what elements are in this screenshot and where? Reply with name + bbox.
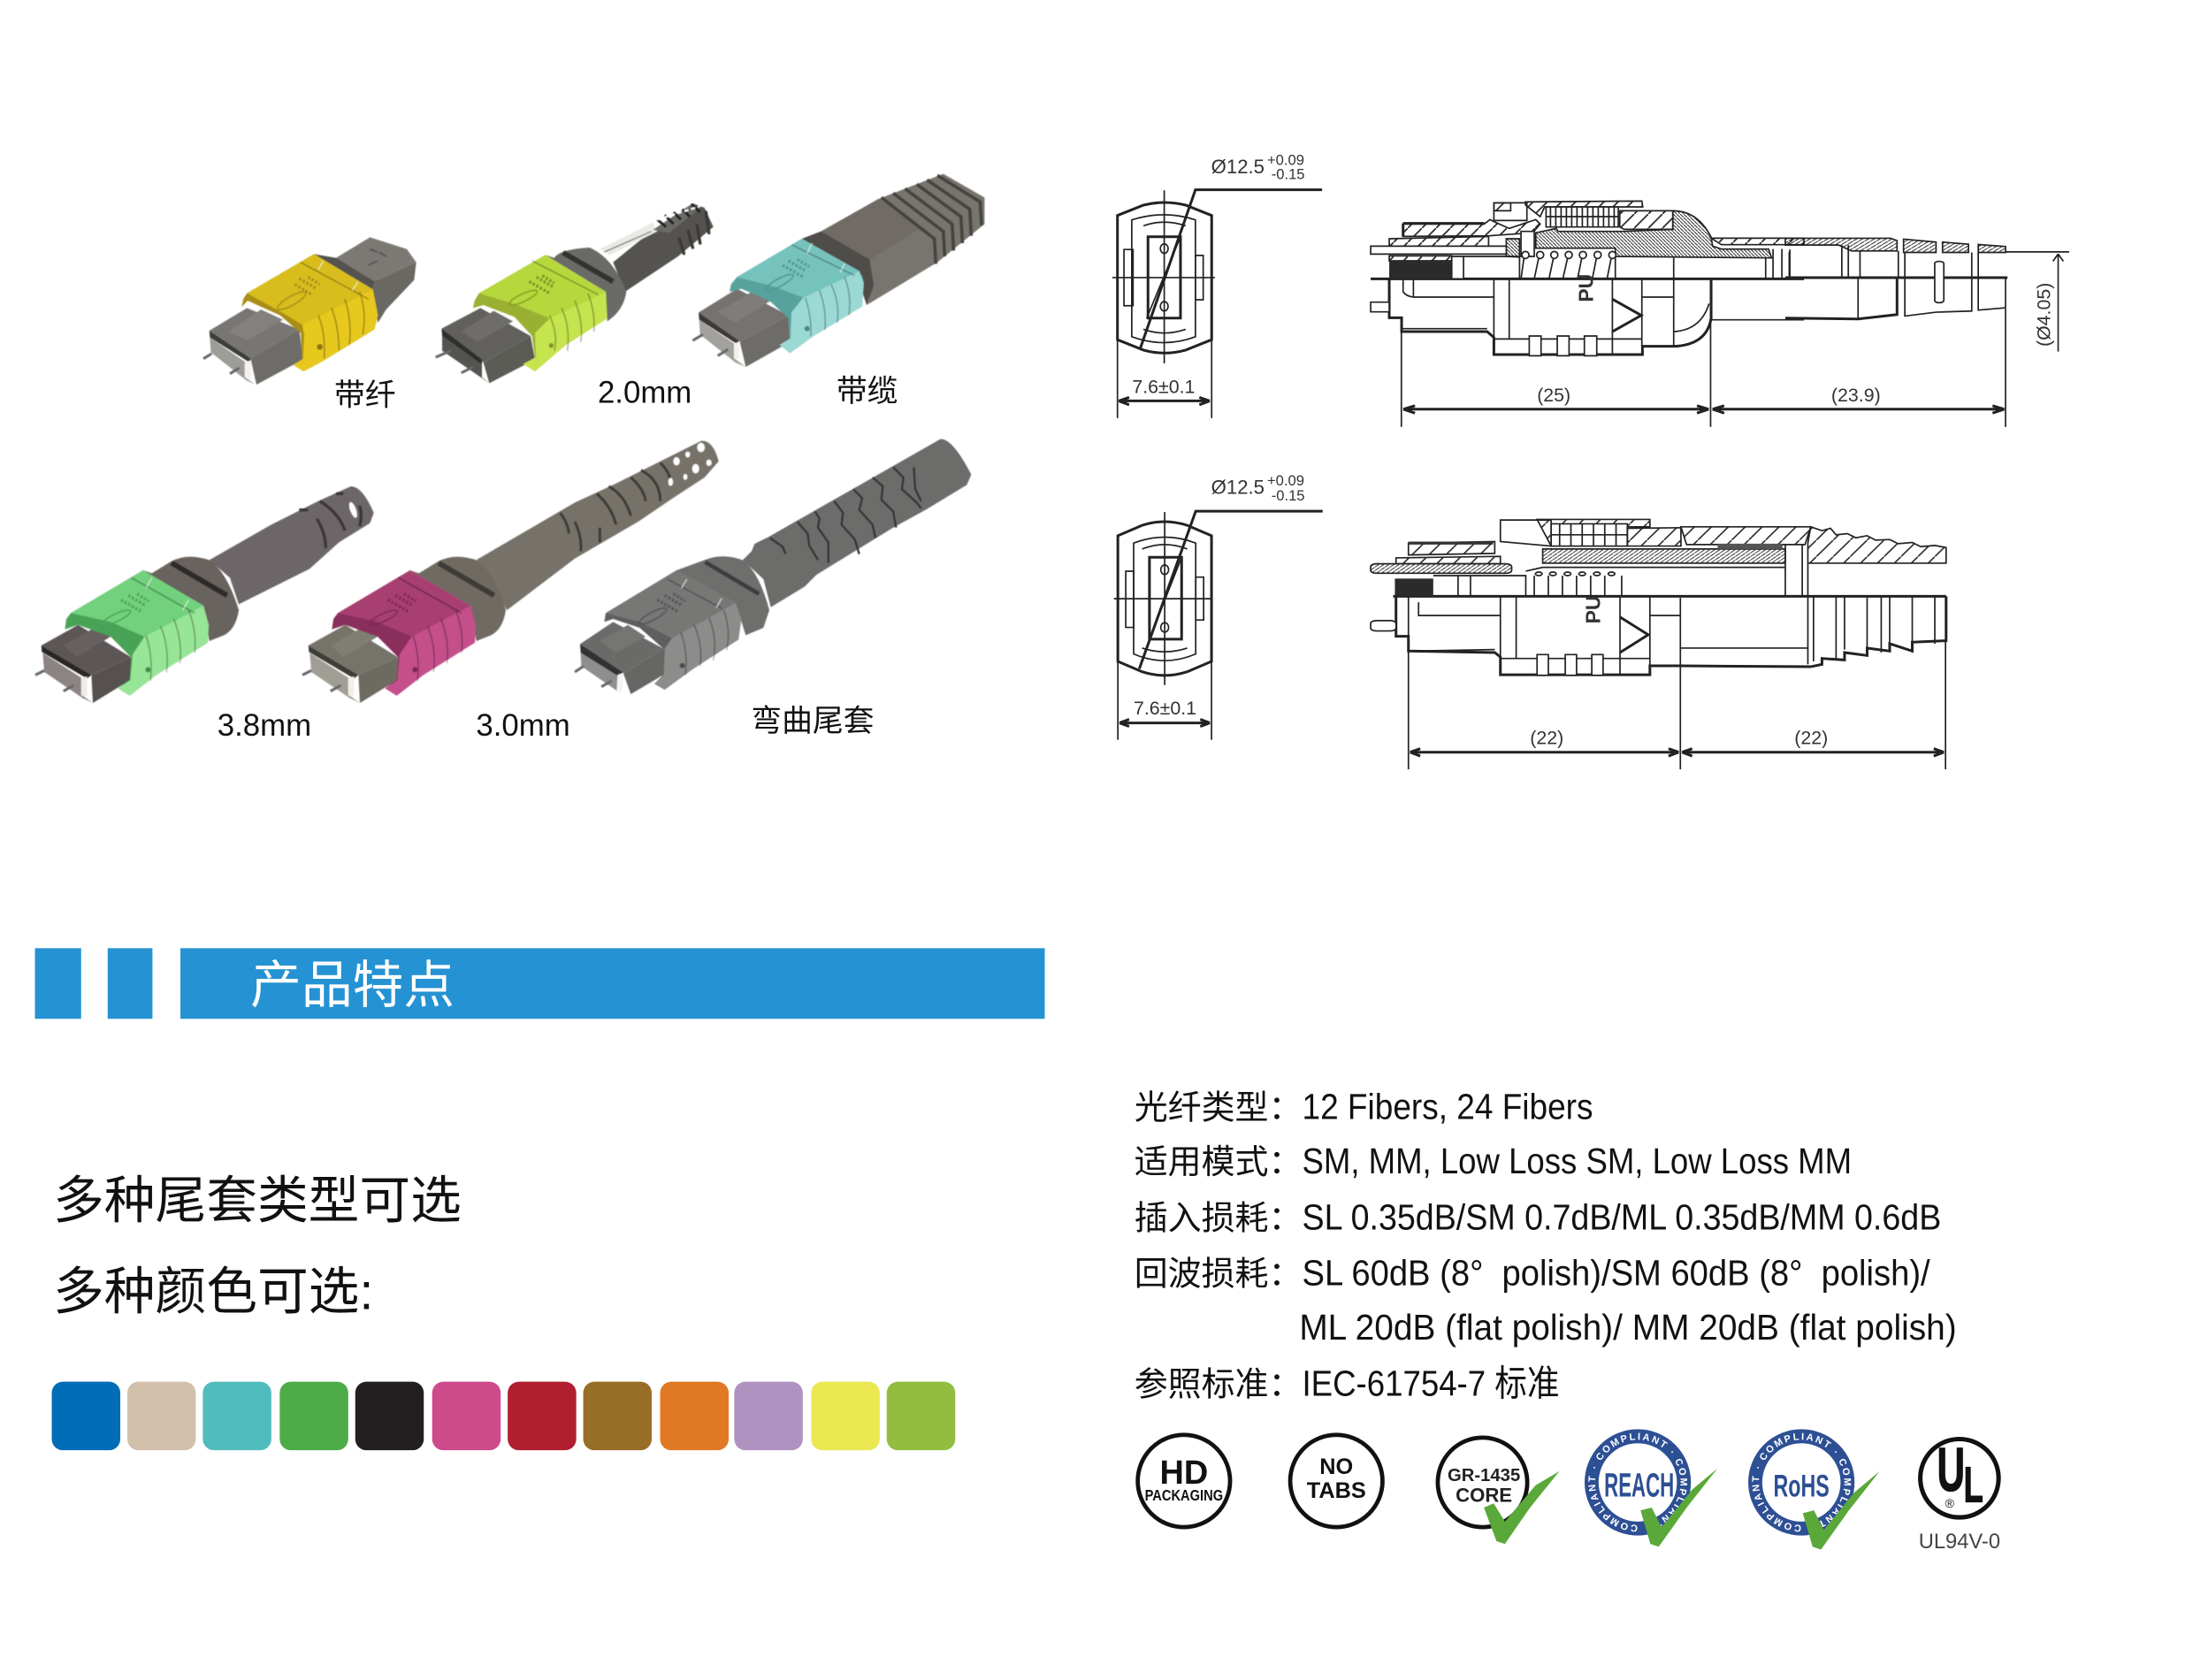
spec: fiber type: 12 Fibers, 24 Fibers xyxy=(1302,1086,1593,1126)
dimension: diameter: +0.09 xyxy=(1267,152,1304,169)
label: ribbon cable: 带缆 xyxy=(837,374,898,409)
dimension: diameter: -0.15 xyxy=(1272,165,1305,182)
badge: GR-1435 core: GR-1435 xyxy=(1448,1465,1520,1485)
dimension: width: 7.6±0.1 xyxy=(1132,376,1195,397)
dimension: diameter xyxy=(1211,152,1305,182)
spec: mode xyxy=(1135,1141,1852,1181)
label: PU marking: PU xyxy=(1574,274,1597,302)
drawing lines: front view, dimensions and boot xyxy=(1112,190,2069,427)
bar accent 2 xyxy=(108,948,152,1019)
connector: green 3.8mm xyxy=(35,486,374,703)
badge: GR-1435 core: CORE xyxy=(1456,1485,1512,1507)
certification badges xyxy=(1135,1429,2001,1554)
spec: return loss line 2: ML 20dB (flat polish)/ MM 20dB (flat polish) xyxy=(1299,1307,1957,1348)
badge: RoHS xyxy=(1748,1429,1880,1549)
dimension: length 22 right: (22) xyxy=(1794,727,1828,748)
badge: no tabs xyxy=(1290,1435,1382,1527)
badge: no tabs: NO xyxy=(1319,1455,1353,1479)
badge: HD packaging xyxy=(1138,1435,1230,1527)
badge: HD packaging: HD xyxy=(1159,1455,1208,1492)
badge: RoHS: RoHS xyxy=(1774,1470,1830,1503)
diagram: top technical drawing xyxy=(1112,152,2069,427)
badge: no tabs: TABS xyxy=(1307,1478,1366,1503)
panel: connector product photos xyxy=(35,174,984,743)
diagram: bottom technical drawing xyxy=(1114,472,1946,769)
dimension: diameter: Ø12.5 xyxy=(1211,476,1265,498)
specification list xyxy=(1135,1086,1957,1403)
label: bend boot: 弯曲尾套 xyxy=(751,704,874,738)
connector: grey bend-insensitive boot xyxy=(575,439,971,694)
dimension: cable diameter: (Ø4.05) xyxy=(2034,283,2055,347)
label: 3.0mm: 3.0mm xyxy=(476,709,570,743)
spec: insertion loss: SL 0.35dB/SM 0.7dB/ML 0.35dB/MM 0.6dB xyxy=(1302,1196,1941,1237)
spec: mode: SM, MM, Low Loss SM, Low Loss MM xyxy=(1302,1141,1852,1181)
spec: fiber type: 光纤类型： xyxy=(1135,1089,1302,1126)
badge: UL 94V-0: U xyxy=(1937,1435,1965,1504)
connector: magenta 3.0mm xyxy=(302,440,719,703)
dimension: length 22 left: (22) xyxy=(1530,727,1563,748)
spec: standard xyxy=(1135,1363,1560,1403)
badge: UL 94V-0: L xyxy=(1964,1457,1983,1514)
badge: UL 94V-0: ® xyxy=(1945,1497,1955,1511)
connector: lime 2.0mm xyxy=(436,203,714,383)
connector: teal ribbon cable xyxy=(692,174,984,367)
spec: return loss: SL 60dB (8° polish)/SM 60dB (8° polish)/ xyxy=(1302,1253,1930,1294)
spec: standard: 参照标准： xyxy=(1135,1366,1302,1403)
spec: mode: 适用模式： xyxy=(1135,1144,1302,1181)
badge: REACH: REACH xyxy=(1604,1467,1674,1504)
text: colours: 多种颜色可选: xyxy=(53,1264,373,1320)
label: ribbon fiber: 带纤 xyxy=(334,379,396,413)
badge: UL 94V-0 xyxy=(1919,1435,2000,1554)
label: PU marking: PU xyxy=(1581,596,1604,623)
badge: REACH: COMPLIANT · COMPLIANT · COMPLIANT · xyxy=(1588,1432,1687,1531)
drawing lines: front and section view xyxy=(1114,511,1946,769)
spec: standard: IEC-61754-7 标准 xyxy=(1302,1363,1560,1403)
heading text: 产品特点 xyxy=(250,958,455,1014)
label: 3.8mm: 3.8mm xyxy=(218,709,311,743)
badge: REACH xyxy=(1585,1429,1717,1547)
dimension: diameter: +0.09 xyxy=(1267,472,1304,489)
bar accent 1 xyxy=(35,948,81,1019)
spec: fiber type xyxy=(1135,1086,1593,1126)
badge: RoHS: COMPLIANT · COMPLIANT · COMPLIANT · xyxy=(1752,1432,1852,1531)
dimension: diameter: -0.15 xyxy=(1272,487,1305,504)
dimension: length 23.9: (23.9) xyxy=(1831,385,1881,406)
bar main xyxy=(180,948,1044,1019)
spec: insertion loss: 插入损耗： xyxy=(1135,1200,1302,1237)
badge: HD packaging: PACKAGING xyxy=(1145,1486,1223,1504)
badge: GR-1435 core xyxy=(1438,1438,1560,1544)
connector: yellow ribbon fiber xyxy=(203,237,416,385)
dimension: diameter: Ø12.5 xyxy=(1211,156,1265,178)
drawing lines: section view xyxy=(1371,201,1804,355)
colour swatches xyxy=(52,1382,955,1450)
dimension: diameter xyxy=(1211,472,1305,504)
dimension: width: 7.6±0.1 xyxy=(1134,698,1196,719)
heading bar: product features xyxy=(35,948,1044,1019)
label: 2.0mm: 2.0mm xyxy=(598,377,692,410)
badge: UL 94V-0: UL94V-0 xyxy=(1919,1531,2000,1554)
text: boot types: 多种尾套类型可选 xyxy=(53,1173,462,1230)
spec: return loss: 回波损耗： xyxy=(1135,1256,1302,1294)
dimension: length 25: (25) xyxy=(1537,385,1570,406)
